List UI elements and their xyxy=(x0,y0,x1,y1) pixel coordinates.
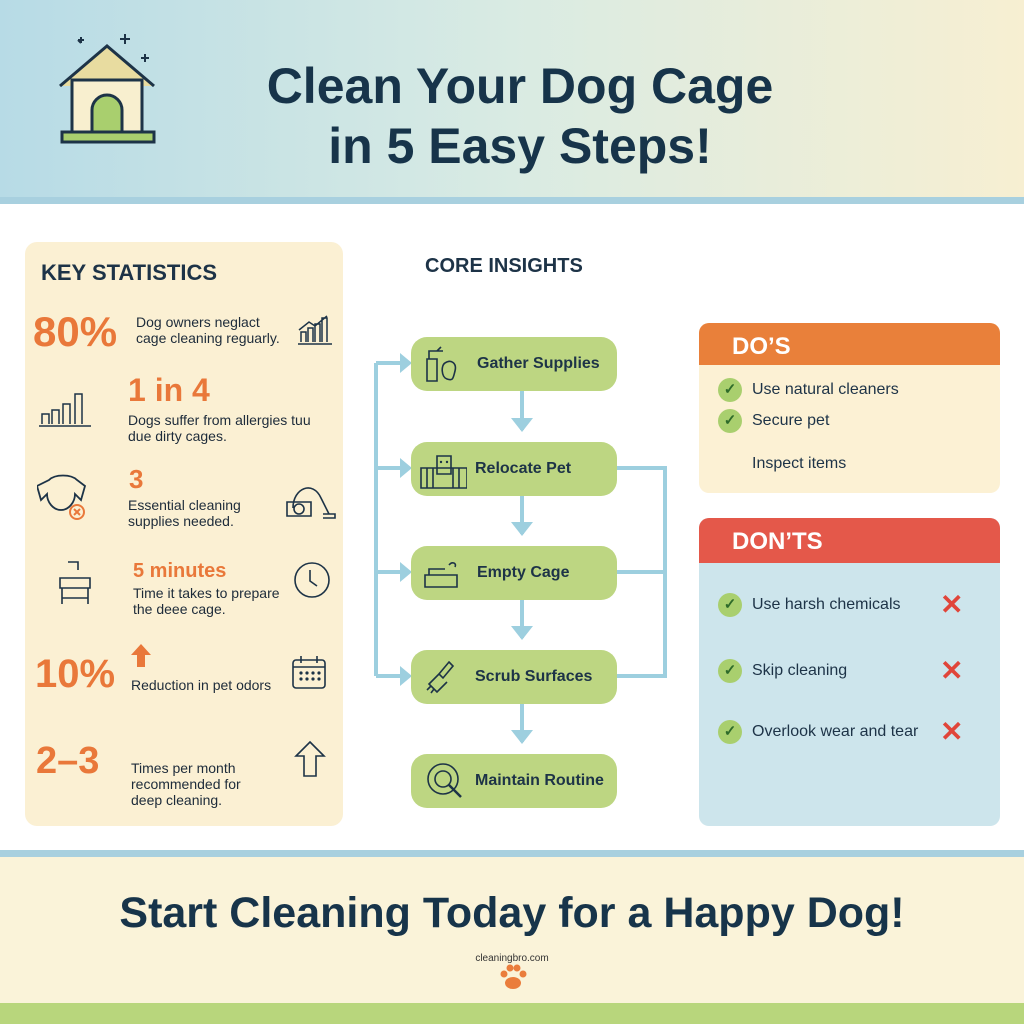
list: don'ts: Use harsh chemicals xyxy=(752,596,900,613)
arrows: flow connectors xyxy=(374,353,667,744)
list: don'ts: ✓ xyxy=(724,662,736,679)
stat: 5 minutes: Time it takes to prepare xyxy=(133,585,280,601)
icon: paw xyxy=(500,964,526,989)
stat: 80%: 80% xyxy=(33,308,117,355)
step: relocate pet xyxy=(411,442,617,496)
stat: 2-3: deep cleaning. xyxy=(131,792,222,808)
step: relocate pet: Relocate Pet xyxy=(475,460,571,477)
list: don'ts: ✓ xyxy=(724,596,736,613)
icon: dog house xyxy=(59,34,156,144)
list: don'ts: ✕ xyxy=(940,716,963,747)
stat: 1 in 4 xyxy=(39,372,311,444)
stat: 3 xyxy=(37,464,336,529)
stat: 1 in 4: Dogs suffer from allergies tuu xyxy=(128,412,311,428)
title: in 5 Easy Steps! xyxy=(328,118,712,174)
list: don'ts: Overlook wear and tear xyxy=(752,723,918,740)
panel: do's xyxy=(699,323,1000,493)
stat: 10% xyxy=(35,644,326,696)
panel: don'ts xyxy=(699,518,1000,826)
stat: 80%: cage cleaning reguarly. xyxy=(136,330,280,346)
stat: 2-3: Times per month xyxy=(131,760,236,776)
stat: 2-3: 2–3 xyxy=(36,740,99,782)
list: don'ts: ✓ xyxy=(724,723,736,740)
footer xyxy=(0,850,1024,1024)
step: empty cage: Empty Cage xyxy=(477,564,569,581)
step: scrub surfaces: Scrub Surfaces xyxy=(475,668,592,685)
header xyxy=(0,0,1024,198)
step: gather supplies xyxy=(411,337,617,391)
list: do's: ✓ xyxy=(724,412,736,429)
list: do's: Secure pet xyxy=(752,412,829,429)
title: Clean Your Dog Cage xyxy=(267,58,773,114)
heading: core insights: CORE INSIGHTS xyxy=(425,255,583,277)
heading: don'ts xyxy=(699,518,1000,563)
stat: 5 minutes xyxy=(59,560,330,617)
heading: don'ts: DON’TS xyxy=(732,528,823,555)
heading: do's: DO’S xyxy=(732,333,791,360)
stat: 10%: Reduction in pet odors xyxy=(131,677,271,693)
list: do's: ✓ xyxy=(724,381,736,398)
stat: 2-3: recommended for xyxy=(131,776,241,792)
heading: key statistics: KEY STATISTICS xyxy=(41,260,217,285)
list: don'ts: Skip cleaning xyxy=(752,662,847,679)
stat: 1 in 4: due dirty cages. xyxy=(128,428,227,444)
stat: 1 in 4: 1 in 4 xyxy=(128,372,210,408)
step: maintain routine xyxy=(411,754,617,808)
list: don'ts: ✕ xyxy=(940,589,963,620)
list: don'ts: ✕ xyxy=(940,655,963,686)
list: do's: Use natural cleaners xyxy=(752,381,899,398)
step: scrub surfaces xyxy=(411,650,617,704)
stat: 10%: 10% xyxy=(35,652,115,696)
list: do's: Inspect items xyxy=(752,455,846,472)
title xyxy=(267,58,773,174)
step: empty cage xyxy=(411,546,617,600)
stat: 80%: Dog owners neglact xyxy=(136,314,260,330)
stat: 5 minutes: the deee cage. xyxy=(133,601,226,617)
step: maintain routine: Maintain Routine xyxy=(475,772,604,789)
brand url: cleaningbro.com xyxy=(475,953,549,964)
stat: 3: Essential cleaning xyxy=(128,497,241,513)
stat: 5 minutes: 5 minutes xyxy=(133,560,226,582)
heading: do's xyxy=(699,323,1000,365)
stat: 2-3 xyxy=(36,740,326,808)
stat: 3: 3 xyxy=(129,464,143,494)
panel: key statistics xyxy=(25,242,343,826)
step: gather supplies: Gather Supplies xyxy=(477,355,600,372)
stat: 3: supplies needed. xyxy=(128,513,234,529)
footer headline: Start Cleaning Today for a Happy Dog! xyxy=(119,889,905,937)
stat: 80% xyxy=(33,308,332,355)
